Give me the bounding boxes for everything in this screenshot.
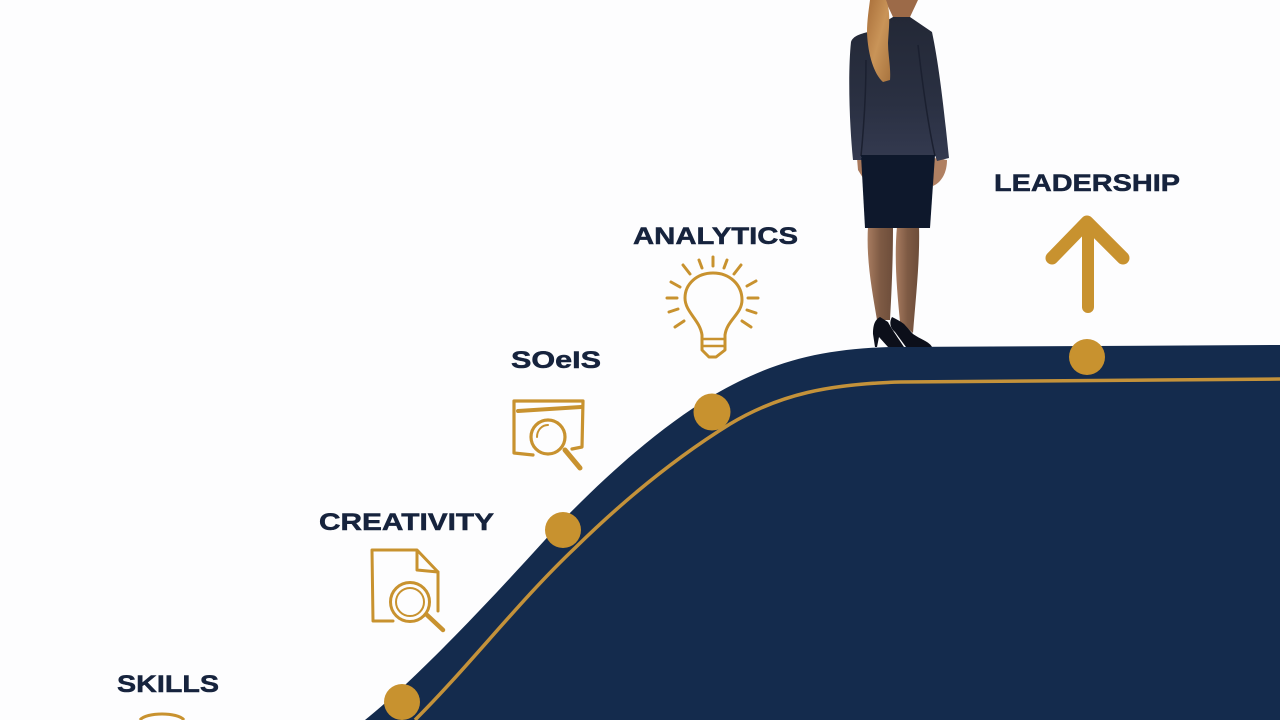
hair ponytail bbox=[867, 0, 890, 82]
woman standing, rear view bbox=[849, 0, 949, 347]
label: soels: SOeIS bbox=[511, 347, 601, 374]
sleeve seams bbox=[861, 45, 935, 156]
milestone dots bbox=[384, 339, 1105, 720]
legs bbox=[868, 226, 893, 320]
icon: skills partial circle bbox=[140, 714, 184, 720]
head and neck bbox=[885, 0, 918, 17]
label: leadership: LEADERSHIP bbox=[994, 170, 1180, 197]
label: skills: SKILLS bbox=[117, 671, 219, 698]
icon: window with magnifier bbox=[514, 401, 583, 468]
shoes bbox=[873, 317, 904, 347]
jacket bbox=[849, 17, 949, 161]
hands bbox=[857, 158, 864, 178]
icon: light bulb bbox=[667, 257, 758, 357]
label: creativity: CREATIVITY bbox=[319, 509, 494, 536]
icon: up arrow bbox=[1052, 222, 1123, 307]
icon: document with magnifier bbox=[372, 550, 443, 630]
skirt bbox=[861, 155, 935, 228]
gold path line bbox=[415, 379, 1280, 720]
career hill bbox=[365, 345, 1280, 720]
label: analytics: ANALYTICS bbox=[633, 223, 798, 250]
